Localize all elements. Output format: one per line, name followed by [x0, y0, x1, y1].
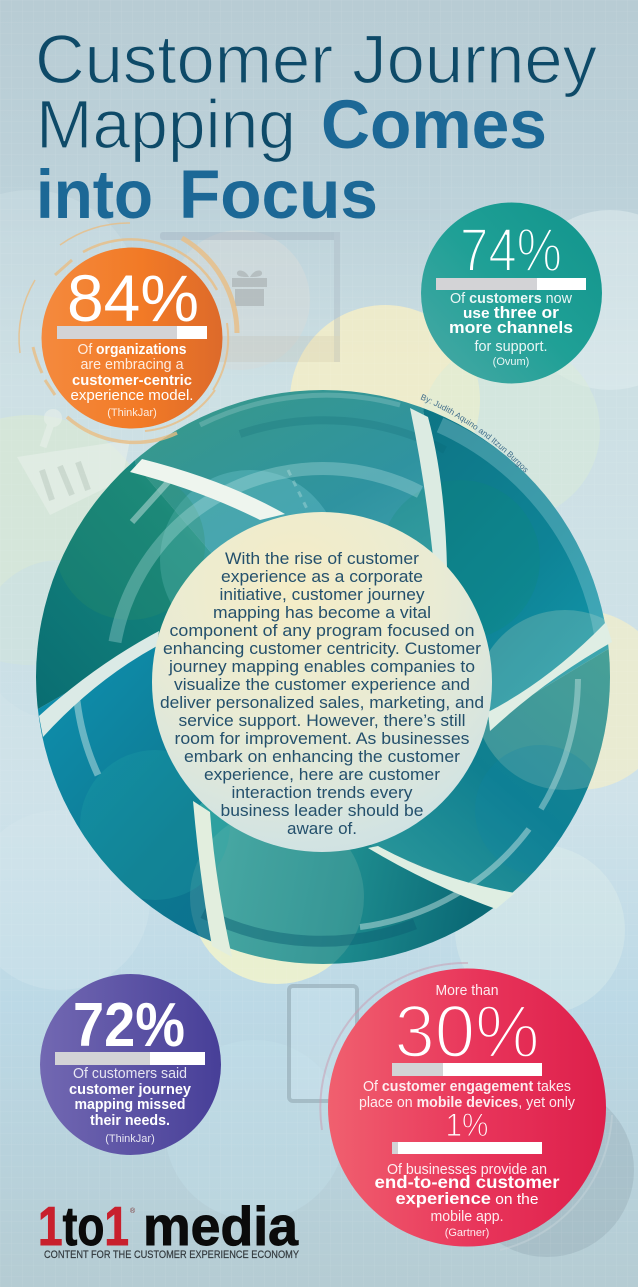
- caption: end-to-end: experience on the: [396, 1189, 538, 1208]
- icon: shopping basket: [17, 409, 130, 515]
- byline: By: Judith Aquino and Itzun Burgos: [420, 394, 528, 472]
- band: left: [39, 631, 159, 737]
- lead-in text: More than: [436, 983, 498, 999]
- caption: engagement: [359, 1079, 576, 1111]
- logo: 1to1 media: [38, 1195, 299, 1261]
- caption: end-to-end: mobile app.: [430, 1209, 504, 1225]
- rings around orange stat: [19, 223, 237, 442]
- caption: 84%: [70, 342, 194, 419]
- text block: introduction: journey mapping enables companies to: [168, 657, 475, 676]
- rings around red stat: [320, 963, 612, 1250]
- text block: introduction: aware of.: [287, 819, 357, 838]
- band: bottom-right: [368, 846, 515, 909]
- text block: introduction: [160, 549, 484, 838]
- text block: introduction: business leader should be: [220, 801, 424, 820]
- progress bar: 30%: [392, 1063, 542, 1076]
- caption: 72%: (ThinkJar): [105, 1133, 155, 1145]
- stat number: 1%: 1%: [446, 1107, 488, 1143]
- caption: 72%: [69, 1066, 191, 1145]
- caption: 84%: experience model.: [70, 388, 194, 404]
- panel: journey disc: [36, 390, 612, 964]
- caption: end-to-end: Of businesses provide an: [387, 1162, 547, 1178]
- caption: end-to-end: [374, 1162, 560, 1239]
- text block: introduction: interaction trends every: [232, 783, 413, 802]
- stat number: 74%: 74%: [460, 216, 562, 284]
- progress bar: 1%: [392, 1142, 542, 1154]
- icon: phone: [289, 986, 357, 1101]
- caption: 84%: (ThinkJar): [107, 407, 157, 419]
- panel: 72% stat: [40, 974, 221, 1155]
- band: top-right: [410, 408, 447, 568]
- band: bottom: [193, 801, 232, 957]
- caption: 74%: (Ovum): [493, 356, 529, 368]
- text block: introduction: experience, here are customer: [204, 765, 440, 784]
- caption: engagement: Of customer engagement takes: [363, 1079, 571, 1095]
- text block: introduction: deliver personalized sales, marketing, and: [160, 693, 484, 712]
- band: right: [488, 622, 612, 731]
- progress bar: 72%: [55, 1052, 205, 1065]
- text block: introduction: room for improvement. As businesses: [174, 729, 470, 748]
- inner circle: [152, 512, 492, 852]
- title: into: [36, 156, 153, 233]
- stat number: 30%: 30%: [394, 990, 540, 1073]
- caption: 74%: for support.: [474, 339, 548, 355]
- text block: introduction: component of any program focused on: [170, 621, 474, 640]
- logo: 1to1 media: ®: [130, 1207, 136, 1215]
- panel: 30% and 1% stat: [328, 968, 606, 1246]
- stat number: 84%: 84%: [67, 261, 199, 335]
- text block: introduction: initiative, customer journey: [220, 585, 425, 604]
- progress bar: 74%: [436, 278, 586, 290]
- text block: introduction: enhancing customer centricity. Customer: [163, 639, 481, 658]
- logo: 1to1 media: media: [143, 1195, 298, 1257]
- caption: 72%: customer journey: [69, 1082, 191, 1098]
- title: [35, 21, 597, 233]
- title: Mapping: [36, 86, 296, 163]
- text block: introduction: service support. However, there’s still: [178, 711, 466, 730]
- caption: 74%: use three or: [463, 304, 560, 322]
- caption: 72%: mapping missed: [74, 1097, 186, 1113]
- tagline: CONTENT FOR THE CUSTOMER EXPERIENCE ECONOMY: [44, 1249, 299, 1261]
- title: Comes: [321, 86, 547, 163]
- caption: end-to-end: (Gartner): [445, 1227, 489, 1239]
- caption: 84%: customer-centric: [72, 373, 192, 389]
- text block: introduction: With the rise of customer: [225, 549, 419, 568]
- text block: introduction: experience as a corporate: [221, 567, 423, 586]
- band: top-left: [130, 459, 285, 520]
- caption: 72%: Of customers said: [73, 1066, 187, 1082]
- panel: 74% stat: [421, 202, 602, 384]
- caption: 74%: Of customers now: [450, 291, 573, 307]
- title: Customer Journey: [35, 21, 597, 98]
- logo: 1to1 media: 1to1: [38, 1195, 129, 1257]
- panel: 84% stat: [42, 248, 222, 428]
- title: Focus: [179, 156, 378, 233]
- icon: gift: [232, 271, 267, 306]
- caption: 84%: Of organizations: [78, 342, 186, 358]
- text block: introduction: mapping has become a vital: [213, 603, 431, 622]
- caption: 74%: [449, 291, 573, 368]
- stat number: 72%: 72%: [73, 991, 185, 1060]
- caption: end-to-end: end-to-end customer: [374, 1172, 560, 1192]
- text block: introduction: embark on enhancing the customer: [184, 747, 460, 766]
- caption: 84%: are embracing a: [80, 357, 184, 373]
- text block: introduction: visualize the customer experience and: [174, 675, 470, 694]
- caption: engagement: place on mobile devices, yet only: [359, 1095, 576, 1111]
- progress bar: 84%: [57, 326, 207, 339]
- caption: 74%: more channels: [449, 319, 573, 337]
- caption: 72%: their needs.: [90, 1113, 170, 1129]
- icon: monitor: [160, 232, 340, 362]
